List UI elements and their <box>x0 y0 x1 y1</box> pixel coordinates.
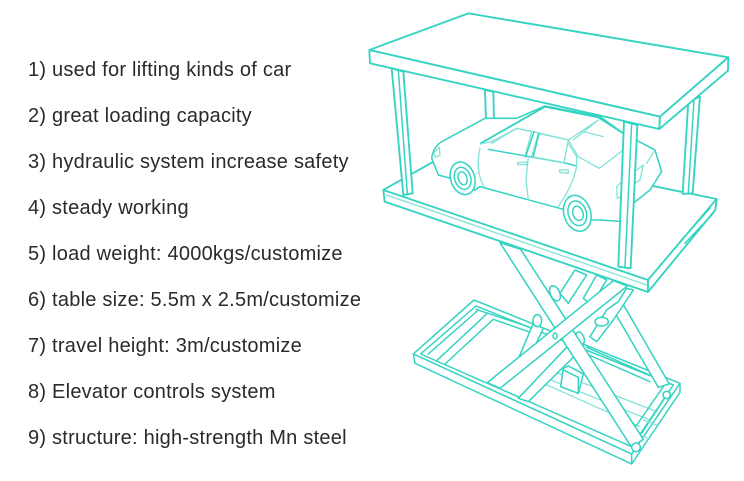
main scissor arm descending <box>500 243 643 447</box>
motor unit <box>561 366 583 393</box>
front post <box>618 122 637 268</box>
door lines <box>478 148 577 207</box>
rear scissor arms <box>518 302 669 402</box>
car <box>432 106 662 235</box>
car body <box>432 106 662 222</box>
side windows <box>488 149 577 166</box>
hydraulic cylinders <box>515 270 633 367</box>
upper structure: platforms, posts, car <box>369 13 728 292</box>
rear left post <box>485 90 494 120</box>
top platform <box>369 13 728 129</box>
lower platform <box>383 147 717 292</box>
text: feature 4: 4) steady working <box>28 197 189 219</box>
pivot pin <box>553 333 557 339</box>
main scissor arm ascending <box>487 281 627 388</box>
text: feature 9: 9) structure: high-strength Mn steel <box>28 427 347 449</box>
headlight <box>433 147 440 157</box>
left post <box>392 68 413 195</box>
right post <box>683 97 700 194</box>
text: feature 2: 2) great loading capacity <box>28 105 252 127</box>
foot rollers <box>632 391 670 452</box>
rear wheel <box>559 192 596 235</box>
front wheel <box>446 159 479 198</box>
text: feature 3: 3) hydraulic system increase safety <box>28 151 349 173</box>
text: feature 8: 8) Elevator controls system <box>28 381 276 403</box>
text: feature 5: 5) load weight: 4000kgs/customize <box>28 243 343 265</box>
windshield and roof <box>481 107 623 143</box>
scissor mechanism and base frame <box>413 243 680 464</box>
text: feature 6: 6) table size: 5.5m x 2.5m/customize <box>28 289 361 311</box>
text: feature 1: 1) used for lifting kinds of car <box>28 59 291 81</box>
text: feature 7: 7) travel height: 3m/customize <box>28 335 302 357</box>
base frame <box>413 300 680 464</box>
rear detail <box>617 150 655 198</box>
door handles <box>517 162 568 173</box>
